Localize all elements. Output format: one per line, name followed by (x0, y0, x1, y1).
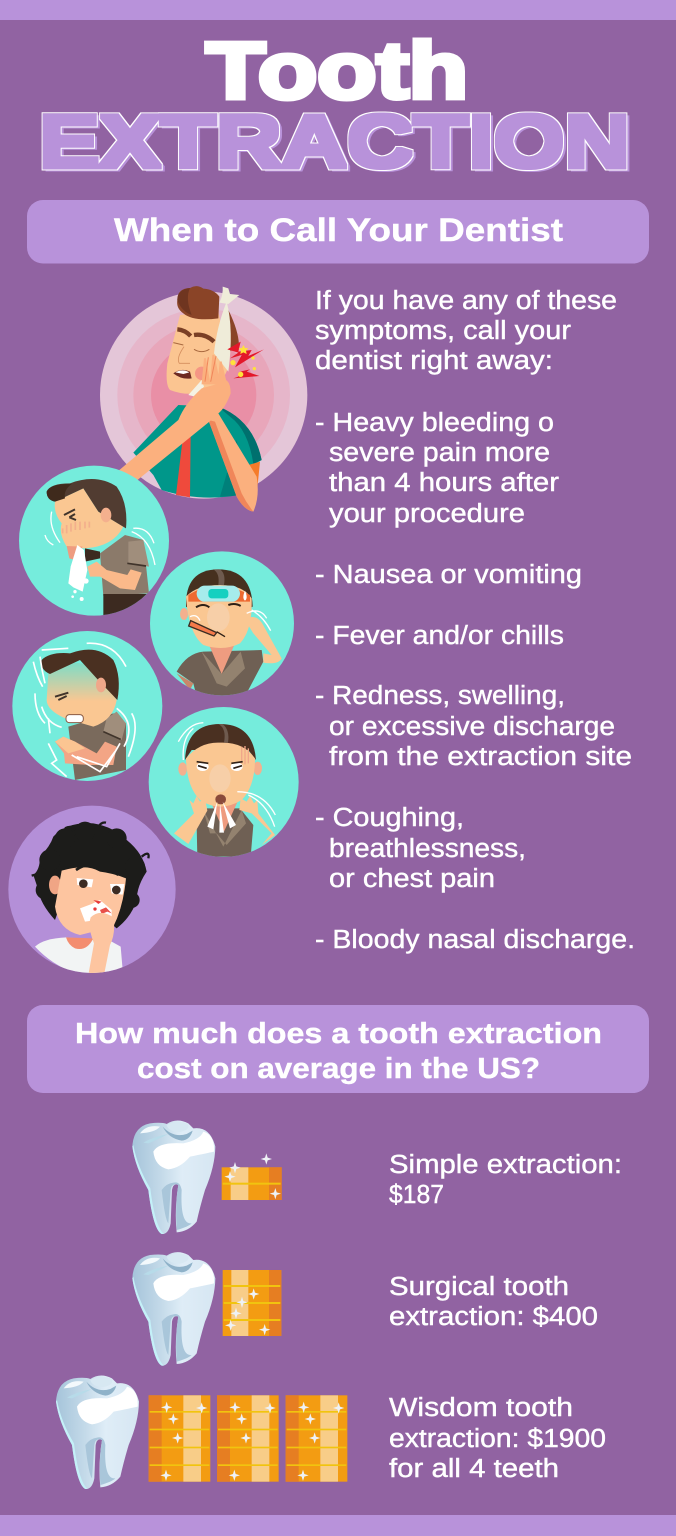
symptoms text: than 4 hours after (329, 469, 560, 497)
symptoms text: - Coughing, (315, 804, 464, 832)
illustration: man with toothache (100, 286, 307, 512)
symptoms text: from the extraction site (329, 743, 632, 771)
illustration: man with fever (150, 551, 294, 697)
symptoms text: or excessive discharge (329, 713, 615, 741)
illustration: coughing man (149, 707, 299, 857)
cost label: wisdom: for all 4 teeth (389, 1455, 559, 1483)
cost label: wisdom (389, 1394, 606, 1483)
cost label: surgical: extraction: $400 (389, 1303, 598, 1331)
title word: EXTRACTION: EXTRACTION (39, 100, 630, 183)
symptoms text: If you have any of these (315, 287, 617, 315)
symptoms text (315, 287, 635, 954)
cost row: wisdom teeth (56, 1375, 606, 1489)
cost label: simple (389, 1151, 622, 1209)
heading panel: when to call: When to Call Your Dentist (114, 212, 563, 248)
tooth and coins: simple (132, 1120, 282, 1234)
cost label: simple: Simple extraction: (389, 1151, 622, 1179)
symptoms text: - Heavy bleeding o (315, 409, 554, 437)
illustration: man with stomach pain (12, 631, 162, 781)
heading panel: when to call (27, 200, 649, 264)
cost label: surgical: Surgical tooth (389, 1273, 569, 1301)
symptoms text: - Nausea or vomiting (315, 561, 582, 589)
heading panel: cost (27, 1005, 649, 1093)
cost label: simple: $187 (389, 1181, 444, 1209)
illustration: vomiting man (19, 466, 169, 617)
symptoms text: breathlessness, (329, 835, 526, 863)
symptoms text: dentist right away: (315, 347, 553, 375)
cost label: surgical (389, 1273, 598, 1331)
symptoms text: - Fever and/or chills (315, 622, 564, 650)
heading panel: cost: How much does a tooth extraction (75, 1018, 602, 1050)
symptoms text: - Bloody nasal discharge. (315, 926, 635, 954)
symptoms text: severe pain more (329, 439, 550, 467)
tooth and coins: wisdom (56, 1375, 347, 1489)
title word: Tooth: Tooth (206, 26, 468, 115)
illustration: child with nosebleed (8, 806, 176, 977)
top band (0, 0, 676, 20)
symptoms text: - Redness, swelling, (315, 682, 565, 710)
symptoms text: or chest pain (329, 865, 495, 893)
bottom band (0, 1515, 676, 1536)
cost row: surgical extraction (132, 1252, 598, 1366)
cost row: simple extraction (132, 1120, 622, 1234)
symptoms text: symptoms, call your (315, 317, 572, 345)
cost label: wisdom: Wisdom tooth (389, 1394, 573, 1422)
title (39, 26, 630, 183)
cost label: wisdom: extraction: $1900 (389, 1425, 606, 1453)
symptoms text: your procedure (329, 500, 525, 528)
tooth and coins: surgical (132, 1252, 281, 1366)
heading panel: cost: cost on average in the US? (137, 1053, 540, 1085)
